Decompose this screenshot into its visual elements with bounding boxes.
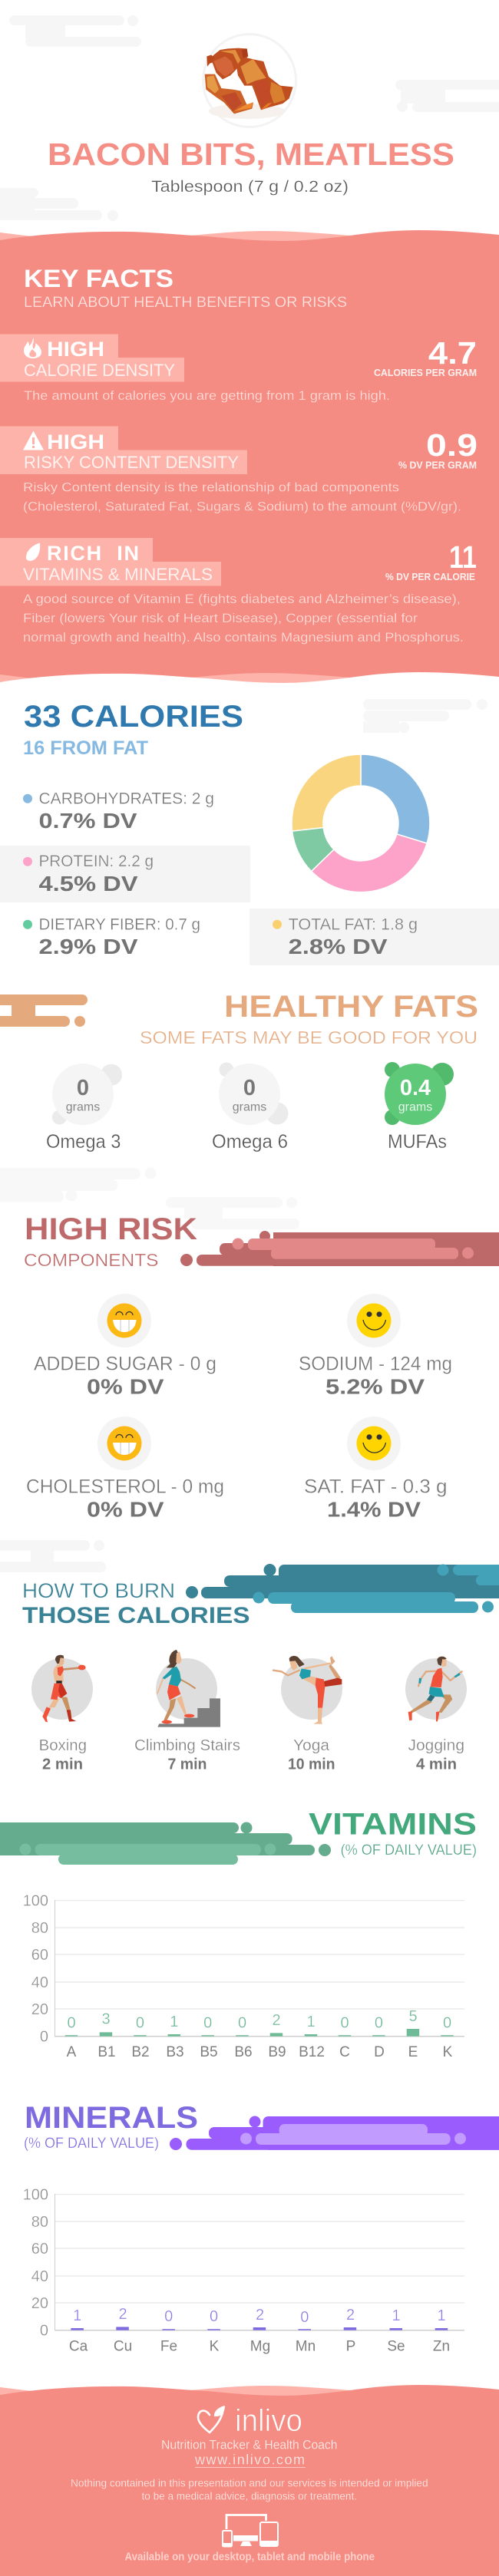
activity: yoga <box>273 1656 342 1773</box>
bar chart: vitamins: 0 <box>136 2015 144 2032</box>
bar chart: vitamins: 3 <box>101 2011 111 2028</box>
unit: % DV PER CALORIE <box>385 571 475 582</box>
stat: carbohydrates: 0.7% DV <box>38 809 137 833</box>
stat: total fat <box>273 916 418 958</box>
stat: dietary fiber: 2.9% DV <box>38 935 138 958</box>
icon: grinning face <box>97 1417 151 1470</box>
heading: key facts: KEY FACTS <box>24 265 173 292</box>
bar chart: vitamins: 0 <box>340 2015 349 2032</box>
availability note: Available on your desktop, tablet and mobile phone <box>124 2551 375 2564</box>
stat: carbohydrates <box>23 790 214 833</box>
bar chart: vitamins: B3 <box>166 2044 184 2060</box>
disclaimer: Nothing contained in this presentation and our services is intended or implied <box>71 2477 428 2489</box>
stat: cholesterol <box>26 1417 224 1522</box>
banner shape <box>0 1822 331 1865</box>
bar chart: vitamins: 40 <box>31 1974 48 1991</box>
disclaimer: to be a medical advice, diagnosis or treatment. <box>141 2490 357 2502</box>
bar chart: minerals: 0 <box>300 2309 309 2326</box>
bar chart: vitamins: 0 <box>203 2015 212 2032</box>
bar chart: minerals: 60 <box>31 2241 48 2258</box>
description: Risky Content density is the relationship of bad components <box>23 480 399 494</box>
stat: saturated fat: 1.4% DV <box>327 1498 421 1522</box>
bar chart: vitamins: 0 <box>67 2015 76 2032</box>
bar chart: minerals: Cu <box>114 2338 132 2354</box>
activity: yoga: 10 min <box>288 1756 335 1773</box>
bar chart: minerals: P <box>346 2338 355 2354</box>
disclaimer <box>71 2477 428 2502</box>
bar chart: minerals: Zn <box>433 2338 450 2354</box>
label: rich in: RICH IN <box>47 542 139 565</box>
heading: HEALTHY FATS <box>224 990 478 1024</box>
row backgrounds <box>0 846 499 965</box>
activity: jogging <box>405 1657 467 1773</box>
stat: cholesterol: CHOLESTEROL - 0 mg <box>26 1476 224 1498</box>
bar chart: minerals: 2 <box>346 2307 355 2324</box>
stat: dietary fiber <box>23 916 200 958</box>
bar chart: vitamins <box>23 1892 464 2060</box>
label: calorie density: CALORIE DENSITY <box>24 361 175 380</box>
bar chart: vitamins: C <box>339 2044 350 2060</box>
heading: VITAMINS <box>309 1808 477 1842</box>
icon: flame <box>24 338 41 358</box>
bar chart: vitamins: 2 <box>272 2012 281 2029</box>
panel: key facts <box>0 230 499 683</box>
activity: jogging: Jogging <box>408 1737 464 1754</box>
subheading: SOME FATS MAY BE GOOD FOR YOU <box>140 1027 478 1047</box>
subheading: (% OF DAILY VALUE) <box>24 2136 159 2152</box>
bar chart: minerals: 80 <box>31 2214 48 2231</box>
panel: vitamins <box>0 1808 477 2060</box>
unit: % DV PER GRAM <box>398 459 477 471</box>
stat: dietary fiber: DIETARY FIBER: 0.7 g <box>38 916 200 934</box>
panel: footer <box>0 2385 499 2576</box>
panel: healthy fats <box>0 990 478 1153</box>
panel: high risk components <box>24 1212 499 1522</box>
icon: warning triangle <box>23 431 44 450</box>
activity: jogging: 4 min <box>416 1756 457 1773</box>
bar chart: vitamins: B6 <box>234 2044 253 2060</box>
heading: 33 calories: 33 CALORIES <box>24 700 243 734</box>
stat: mufas: grams <box>398 1101 432 1114</box>
bar chart: minerals: Fe <box>160 2338 177 2354</box>
description: Fiber (lowers Your risk of Heart Disease), Copper (essential for <box>23 611 418 625</box>
bar chart: minerals: Mg <box>250 2338 270 2354</box>
heading line 2: THOSE CALORIES <box>22 1603 250 1628</box>
serving size: Tablespoon (7 g / 0.2 oz) <box>151 178 349 196</box>
bar chart: minerals: 0 <box>164 2308 173 2325</box>
bar chart: vitamins: 5 <box>408 2008 418 2025</box>
heading: MINERALS <box>25 2101 198 2135</box>
bar chart: minerals: 20 <box>31 2295 48 2312</box>
food photo: bacon <box>203 34 296 127</box>
bar chart: minerals <box>23 2187 464 2354</box>
label: vitamins and minerals: VITAMINS & MINERALS <box>23 565 213 584</box>
bar chart: minerals: 1 <box>73 2307 81 2324</box>
value: 4.7: 4.7 <box>428 335 477 371</box>
stat: total fat: TOTAL FAT: 1.8 g <box>289 916 418 934</box>
banner shape <box>180 1231 499 1266</box>
value: 11: 11 <box>449 539 477 575</box>
stat: sodium: SODIUM - 124 mg <box>299 1354 452 1375</box>
bar chart: vitamins: 0 <box>375 2015 383 2032</box>
activity: climbing stairs: Climbing Stairs <box>134 1737 240 1754</box>
bar chart: minerals: 2 <box>256 2307 264 2324</box>
heading line 1: HOW TO BURN <box>22 1579 175 1602</box>
label: high: HIGH <box>47 430 104 454</box>
bar chart: vitamins: 0 <box>238 2015 246 2032</box>
bar chart: minerals: K <box>210 2338 220 2354</box>
stat: omega 6 <box>212 1062 289 1153</box>
icon: stair climber <box>157 1650 220 1727</box>
stat: cholesterol: 0% DV <box>87 1498 164 1522</box>
bar chart: vitamins: B2 <box>131 2044 150 2060</box>
bar chart: minerals: 1 <box>437 2307 446 2324</box>
panel: how to burn those calories <box>22 1564 499 1773</box>
description: (Cholesterol, Saturated Fat, Sugars & Sodium) to the amount (%DV/gr). <box>23 499 461 514</box>
description: A good source of Vitamin E (fights diabetes and Alzheimer’s disease), <box>23 592 461 606</box>
stat: mufas <box>385 1062 454 1153</box>
stat: sodium <box>299 1294 452 1399</box>
icon: devices <box>222 2515 278 2547</box>
icon: boxer <box>42 1655 86 1722</box>
bar chart: vitamins: 100 <box>23 1892 48 1909</box>
panel: minerals <box>23 2101 499 2354</box>
stat: protein <box>23 853 154 895</box>
banner shape <box>186 1564 499 1613</box>
donut chart <box>292 754 430 892</box>
panel: calories <box>0 700 499 965</box>
bar chart: vitamins: B9 <box>268 2044 286 2060</box>
icon: smiling face <box>347 1417 401 1470</box>
label: risky content density: RISKY CONTENT DENSITY <box>24 453 239 472</box>
icon: jogger <box>408 1657 462 1721</box>
bar chart: minerals: Mn <box>296 2338 316 2354</box>
bar chart: minerals: Se <box>387 2338 405 2354</box>
description <box>23 592 464 645</box>
subheading: LEARN ABOUT HEALTH BENEFITS OR RISKS <box>24 295 347 311</box>
activity: climbing stairs: 7 min <box>167 1756 207 1773</box>
icon: yoga pose <box>273 1656 342 1724</box>
activity: boxing: 2 min <box>42 1756 83 1773</box>
bar chart: minerals: 2 <box>118 2306 127 2323</box>
stat: sodium: 5.2% DV <box>326 1375 425 1399</box>
bar chart: vitamins: 80 <box>31 1920 48 1937</box>
logo: inlivo: inlivo <box>235 2403 302 2438</box>
subheading: COMPONENTS <box>24 1250 158 1270</box>
bar chart: vitamins: 0 <box>443 2015 451 2032</box>
bar chart: minerals: 1 <box>392 2307 401 2324</box>
fact: rich in vitamins and minerals <box>0 538 477 645</box>
stat: omega 3 <box>46 1064 122 1153</box>
bar chart: vitamins: 1 <box>170 2014 178 2030</box>
banner shape <box>170 2116 499 2150</box>
tagline: Nutrition Tracker & Health Coach <box>161 2439 338 2452</box>
stat: protein: PROTEIN: 2.2 g <box>38 853 154 870</box>
stat: omega 6: 0 <box>243 1076 256 1100</box>
bar chart: minerals: Ca <box>69 2338 88 2354</box>
icon: smiling face <box>347 1294 401 1347</box>
stat: saturated fat <box>304 1417 447 1522</box>
unit: CALORIES PER GRAM <box>374 367 477 378</box>
title: BACON BITS, MEATLESS <box>48 137 454 172</box>
stat: omega 3: grams <box>66 1101 100 1114</box>
activity: boxing <box>31 1655 93 1773</box>
bar chart: vitamins: 20 <box>31 2001 48 2018</box>
stat: added sugar <box>34 1294 216 1399</box>
bar chart: vitamins: 60 <box>31 1947 48 1964</box>
description: The amount of calories you are getting from 1 gram is high. <box>24 388 390 403</box>
label: high: HIGH <box>47 338 104 361</box>
stat: total fat: 2.8% DV <box>289 935 388 958</box>
bar chart: vitamins: E <box>408 2044 418 2060</box>
bar chart: vitamins: K <box>443 2044 453 2060</box>
stat: added sugar: ADDED SUGAR - 0 g <box>34 1354 216 1375</box>
bar chart: vitamins: 0 <box>40 2029 48 2046</box>
description <box>23 480 461 514</box>
subheading: 16 from fat: 16 FROM FAT <box>23 737 148 759</box>
bar chart: minerals: 0 <box>210 2308 218 2325</box>
activity: boxing: Boxing <box>39 1737 87 1754</box>
icon: grinning face <box>97 1294 151 1347</box>
activity: yoga: Yoga <box>293 1737 330 1754</box>
description: normal growth and health). Also contains Magnesium and Phosphorus. <box>23 630 464 645</box>
banner shape <box>0 994 88 1027</box>
fact: risky content density <box>0 427 478 514</box>
bar chart: minerals: 0 <box>40 2322 48 2339</box>
value: 0.9: 0.9 <box>426 427 478 463</box>
stat: protein: 4.5% DV <box>38 872 138 895</box>
activity: climbing stairs <box>134 1650 240 1773</box>
website link: www.inlivo.com <box>194 2452 305 2468</box>
bar chart: vitamins: 1 <box>306 2014 316 2030</box>
stat: omega 3: Omega 3 <box>46 1131 121 1153</box>
icon: leaf <box>26 543 40 561</box>
stat: saturated fat: SAT. FAT - 0.3 g <box>304 1476 447 1498</box>
bar chart: vitamins: A <box>67 2044 77 2060</box>
stat: omega 3: 0 <box>77 1076 89 1100</box>
stat: mufas: 0.4 <box>400 1076 431 1100</box>
bar chart: minerals: 100 <box>23 2187 48 2204</box>
bar chart: minerals: 40 <box>31 2268 48 2285</box>
heading: HIGH RISK <box>25 1212 197 1246</box>
stat: added sugar: 0% DV <box>87 1375 164 1399</box>
logo: inlivo <box>198 2403 302 2438</box>
stat: omega 6: Omega 6 <box>212 1131 288 1153</box>
subheading: (% OF DAILY VALUE) <box>341 1842 477 1859</box>
bar chart: vitamins: B12 <box>299 2044 325 2060</box>
bar chart: vitamins: B1 <box>97 2044 116 2060</box>
stat: carbohydrates: CARBOHYDRATES: 2 g <box>38 790 214 808</box>
bar chart: vitamins: D <box>374 2044 385 2060</box>
fact: calorie density <box>0 335 477 403</box>
stat: omega 6: grams <box>233 1101 266 1114</box>
bar chart: vitamins: B5 <box>200 2044 218 2060</box>
stat: mufas: MUFAs <box>388 1131 447 1153</box>
